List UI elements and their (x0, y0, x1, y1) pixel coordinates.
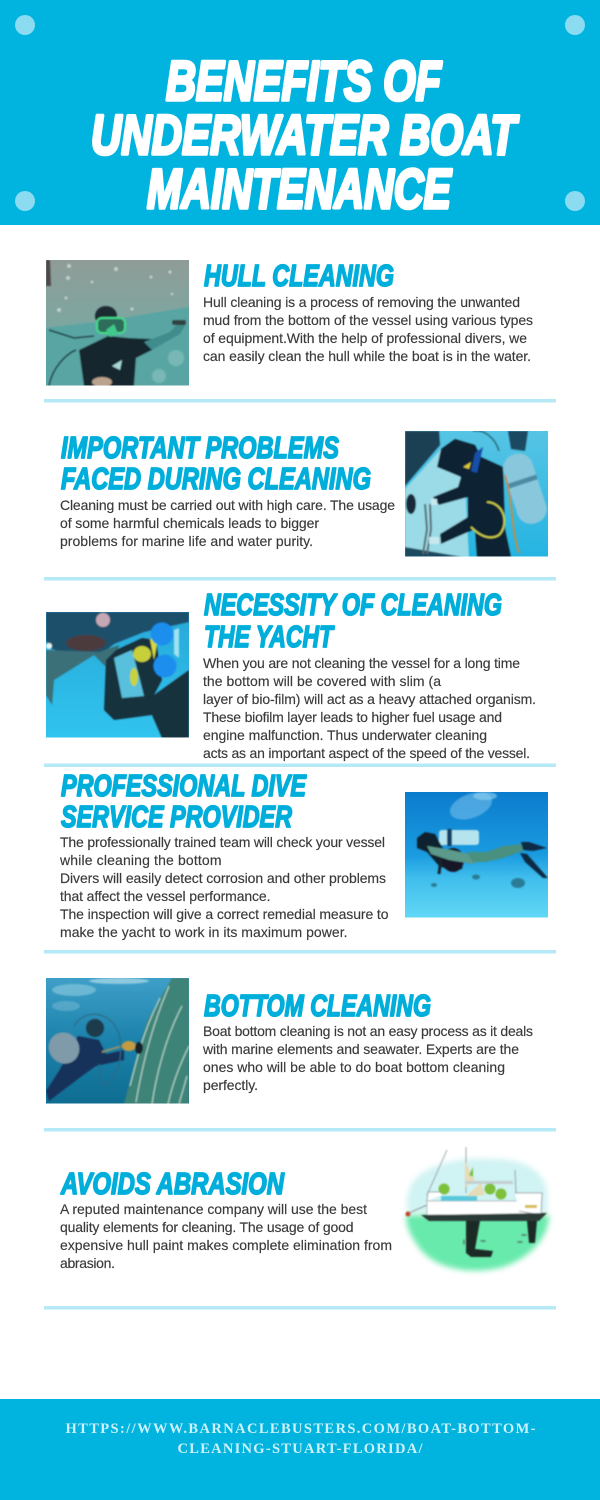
body text: make the yacht to work in its maximum power. (60, 924, 348, 940)
title: MAINTENANCE (147, 157, 452, 220)
photo: diver with tank on hull (405, 431, 550, 557)
heading (61, 768, 307, 834)
body text (60, 1201, 392, 1271)
body text: Divers will easily detect corrosion and other problems (60, 870, 386, 886)
body text: acts as an important aspect of the speed of the vessel. (203, 745, 530, 761)
body text: expensive hull paint makes complete elimination from (60, 1237, 392, 1253)
decorative corner dots (15, 15, 585, 211)
body text: can easily clean the hull while the boat is in the water. (203, 348, 531, 364)
body text: that affect the vessel performance. (60, 888, 270, 904)
divider (44, 399, 556, 402)
footer url text: HTTPS://WWW.BARNACLEBUSTERS.COM/BOAT-BOTTOM- (66, 1421, 536, 1437)
body text: layer of bio-film) will act as a heavy attached organism. (203, 691, 536, 707)
body text: the bottom will be covered with slim (a (203, 673, 441, 689)
body text: The professionally trained team will check your vessel (60, 834, 385, 850)
photo: diver under hull (46, 260, 189, 387)
heading: SERVICE PROVIDER (61, 799, 292, 834)
footer url text (66, 1421, 536, 1457)
body text: Cleaning must be carried out with high care. The usage (60, 497, 395, 513)
section: hull cleaning (46, 258, 533, 387)
body text: The inspection will give a correct remedial measure to (60, 906, 389, 922)
body text (203, 294, 533, 364)
heading: FACED DURING CLEANING (61, 461, 371, 496)
heading: IMPORTANT PROBLEMS (61, 430, 339, 465)
body text: These biofilm layer leads to higher fuel usage and (203, 709, 502, 725)
footer url text: CLEANING-STUART-FLORIDA/ (178, 1441, 423, 1457)
divider (44, 764, 556, 767)
illustration: sailboat hull with fouling (406, 1147, 549, 1271)
title: BENEFITS OF (166, 49, 442, 112)
title (91, 49, 520, 220)
body text: problems for marine life and water purity. (60, 533, 313, 549)
body text: with marine elements and seawater. Experts are the (202, 1041, 519, 1057)
body text: Hull cleaning is a process of removing the unwanted (203, 294, 520, 310)
heading: HULL CLEANING (204, 258, 394, 293)
divider (44, 1128, 556, 1132)
section: professional dive service (59, 768, 548, 940)
heading: BOTTOM CLEANING (204, 988, 431, 1023)
divider (44, 1306, 556, 1310)
body text: When you are not cleaning the vessel for a long time (203, 655, 520, 671)
body text (60, 497, 395, 549)
photo: diver with blue circles (46, 612, 189, 738)
heading: THE YACHT (204, 619, 335, 654)
photo: scuba diver in blue water (405, 787, 548, 918)
section: bottom cleaning (43, 978, 533, 1104)
header banner (0, 0, 600, 225)
divider (44, 950, 556, 954)
divider (44, 577, 556, 580)
body text: of some harmful chemicals leads to bigger (60, 515, 319, 531)
section: necessity of cleaning (46, 587, 536, 761)
body text: while cleaning the bottom (59, 852, 222, 868)
body text: Boat bottom cleaning is not an easy process as it deals (203, 1023, 533, 1039)
body text (202, 1023, 533, 1093)
heading: PROFESSIONAL DIVE (61, 768, 307, 803)
body text: quality elements for cleaning. The usage of good (60, 1219, 354, 1235)
body text: abrasion. (60, 1255, 115, 1271)
section: avoids abrasion (60, 1147, 549, 1271)
photo: diver cleaning hull (43, 978, 189, 1104)
body text: perfectly. (203, 1077, 258, 1093)
heading (61, 430, 371, 496)
heading: NECESSITY OF CLEANING (204, 587, 502, 622)
body text: mud from the bottom of the vessel using various types (203, 312, 533, 328)
body text (59, 834, 389, 940)
heading (204, 587, 502, 654)
footer banner (0, 1399, 600, 1500)
section: important problems (60, 430, 550, 557)
body text: of equipment.With the help of professional divers, we (203, 330, 527, 346)
body text: A reputed maintenance company will use the best (60, 1201, 367, 1217)
body text: engine malfunction. Thus underwater cleaning (203, 727, 487, 743)
heading: AVOIDS ABRASION (60, 1166, 284, 1201)
body text (203, 655, 536, 761)
body text: ones who will be able to do boat bottom cleaning (203, 1059, 505, 1075)
